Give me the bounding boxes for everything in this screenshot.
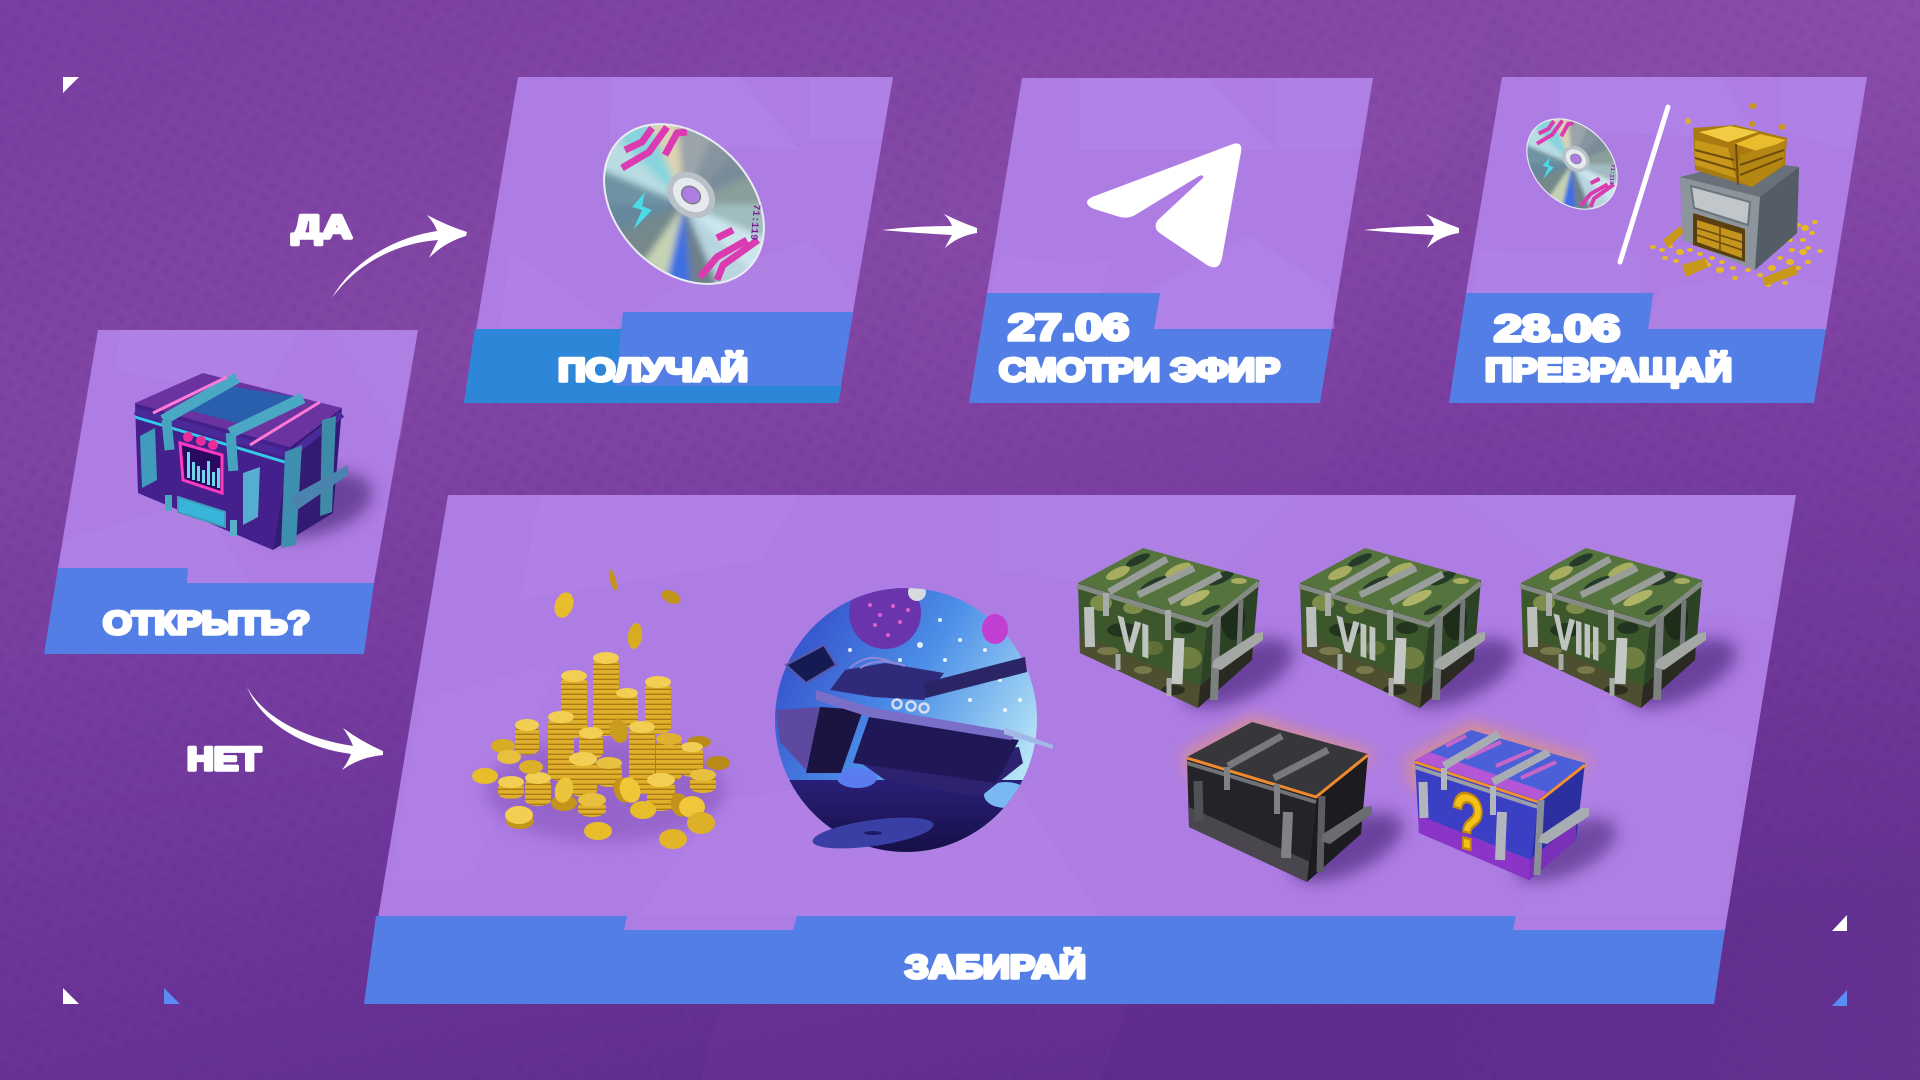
- icon: pink disc ball: [982, 614, 1008, 644]
- label: no: НЕТ: [187, 741, 262, 777]
- icon: gold crate: [1650, 103, 1823, 287]
- corner marks: [63, 77, 1847, 1006]
- label: take: ЗАБИРАЙ: [905, 949, 1086, 985]
- chest blue label: [44, 568, 374, 654]
- arrow: yes: [332, 215, 467, 298]
- label: watch stream: СМОТРИ ЭФИР: [999, 352, 1280, 388]
- date: 27.06: 27.06: [1008, 307, 1129, 348]
- icon: chest VI: VI: [1118, 606, 1150, 668]
- icon: black chest: [1182, 716, 1412, 896]
- icon: chest VII: VII: [1337, 606, 1377, 671]
- icon: mystery chest: [1405, 722, 1626, 895]
- icon: disc: [554, 74, 814, 334]
- panel: rewards: [364, 495, 1796, 1004]
- label: open: ОТКРЫТЬ?: [103, 605, 310, 641]
- chest blue label: [1449, 293, 1826, 403]
- icon: neon chest: [135, 373, 380, 550]
- icon: chest VI: [1077, 548, 1303, 722]
- icon: small disc: [1499, 91, 1645, 237]
- tank body: [776, 645, 1053, 797]
- icon: chest VIII: VIII: [1554, 604, 1600, 670]
- icon: tank in circle: [770, 548, 1746, 985]
- panel: watch stream: [969, 78, 1373, 403]
- panel: get disc: [464, 74, 893, 403]
- icon: question mark: ?: [1451, 773, 1485, 871]
- arrow: to stream: [882, 214, 977, 248]
- arrow: to convert: [1364, 214, 1459, 248]
- icon: chest VII: [1299, 548, 1525, 722]
- label: yes: ДА: [292, 209, 352, 245]
- chest blue label: [969, 293, 1332, 403]
- panel: open chest: [44, 330, 418, 654]
- divider slash: [1620, 107, 1668, 262]
- icon: gold coins: [472, 569, 730, 849]
- chest blue label: [464, 312, 853, 403]
- chest blue label: [364, 916, 1725, 1004]
- arrow: no: [247, 687, 383, 770]
- label: get: ПОЛУЧАЙ: [558, 352, 748, 388]
- icon: dropped disc: [811, 812, 935, 854]
- label: convert: ПРЕВРАЩАЙ: [1485, 352, 1732, 388]
- date: 28.06: 28.06: [1494, 308, 1620, 349]
- panel: convert: [1449, 77, 1867, 403]
- icon: chest VIII: [1520, 548, 1746, 722]
- icon: telegram plane: [1087, 143, 1241, 267]
